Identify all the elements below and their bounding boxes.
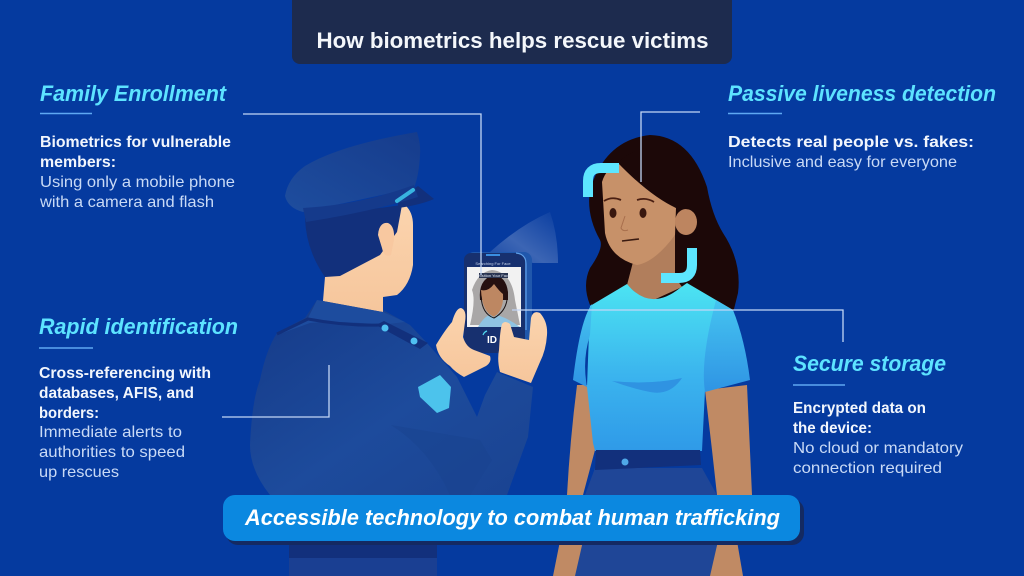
phone with face scan [436, 252, 547, 383]
panel: family enrollment: Family Enrollment [40, 81, 228, 106]
left sleeve [573, 304, 592, 387]
bottom banner [223, 495, 804, 545]
panel: secure storage: the device: [793, 420, 872, 437]
panel: family enrollment: Using only a mobile phone [40, 174, 235, 191]
eyes and eyebrows [604, 198, 654, 241]
phone flash beam [490, 212, 558, 263]
epaulet [376, 321, 428, 349]
shoulder badge [418, 375, 451, 413]
cap band [303, 185, 418, 222]
panel: rapid identification: borders: [39, 405, 99, 422]
officer figure [250, 132, 533, 576]
cap visor [398, 186, 434, 208]
left hand [436, 308, 490, 377]
title: How biometrics helps rescue victims [316, 28, 708, 53]
panel: rapid identification: Cross-referencing with [39, 365, 211, 382]
officer legs [289, 541, 437, 576]
neck [627, 235, 682, 303]
t-shirt [587, 283, 733, 451]
panel: family enrollment: Biometrics for vulnerable [40, 134, 231, 151]
forearm left lower [553, 541, 583, 576]
officer neck and face [323, 205, 413, 312]
left arm [567, 385, 595, 495]
panel: rapid identification: Immediate alerts to [39, 424, 182, 441]
right arm [705, 385, 752, 495]
leader line: secure storage [512, 310, 843, 342]
right sleeve [704, 300, 750, 392]
phone front [464, 253, 525, 353]
leader line: family enrollment [243, 114, 481, 275]
officer belt shadow [289, 541, 437, 558]
long hair [586, 135, 739, 313]
panel: secure storage: connection required [793, 460, 942, 477]
panel: family enrollment [39, 81, 235, 211]
woman figure [553, 135, 752, 576]
belt [595, 450, 701, 470]
title box [292, 0, 732, 64]
phone speaker [486, 254, 500, 256]
trousers [585, 468, 717, 495]
officer ear [378, 223, 394, 256]
portrait outline [481, 296, 507, 318]
panel: secure storage: No cloud or mandatory [793, 440, 963, 457]
phone body side [466, 252, 532, 353]
phone screen header: Searching For Face [475, 261, 511, 266]
officer hair [305, 205, 402, 277]
leader line: passive liveness [641, 112, 700, 182]
phone edge highlight [516, 253, 526, 330]
forearm right lower [710, 541, 743, 576]
phone with face scan: Position Your Face [477, 273, 511, 278]
officer collar [277, 300, 405, 335]
panel: family enrollment: members: [40, 154, 116, 171]
panel: rapid identification: databases, AFIS, and [39, 385, 194, 402]
shirt crease [612, 378, 682, 393]
banner text: Accessible technology to combat human trafficking [244, 505, 781, 530]
cap button [397, 190, 413, 201]
face scan bracket: bottom right [661, 248, 692, 278]
prompt label [479, 273, 508, 278]
scan hair shadow [470, 270, 520, 325]
hair over forehead [618, 147, 695, 210]
panel: secure storage: Secure storage [793, 351, 946, 376]
panel: passive liveness detection: Passive liveness detection [728, 81, 996, 106]
panel: rapid identification: Rapid identification [39, 314, 238, 339]
panel: passive liveness detection [728, 81, 996, 171]
portrait face [481, 284, 503, 317]
officer cap [285, 132, 420, 212]
panel: rapid identification [39, 314, 238, 481]
id logo: ID [487, 335, 497, 346]
officer jacket [250, 300, 533, 495]
panel: rapid identification: up rescues [39, 464, 119, 481]
face [602, 163, 676, 265]
ear [675, 209, 697, 235]
portrait shoulders [478, 314, 520, 327]
panel: family enrollment: with a camera and flash [39, 194, 214, 211]
face scan bracket: top left [588, 168, 619, 197]
officer arm fold [391, 425, 492, 495]
phone screen [467, 267, 521, 327]
panel: secure storage: Encrypted data on [793, 400, 926, 417]
right hand [498, 312, 547, 383]
panel: secure storage [793, 351, 963, 477]
leader line: rapid identification [222, 365, 329, 417]
panel: passive liveness detection: Detects real people vs. fakes: [728, 134, 974, 151]
panel: rapid identification: authorities to speed [39, 444, 185, 461]
panel: passive liveness detection: Inclusive and easy for everyone [728, 154, 957, 171]
portrait hair [480, 275, 508, 300]
